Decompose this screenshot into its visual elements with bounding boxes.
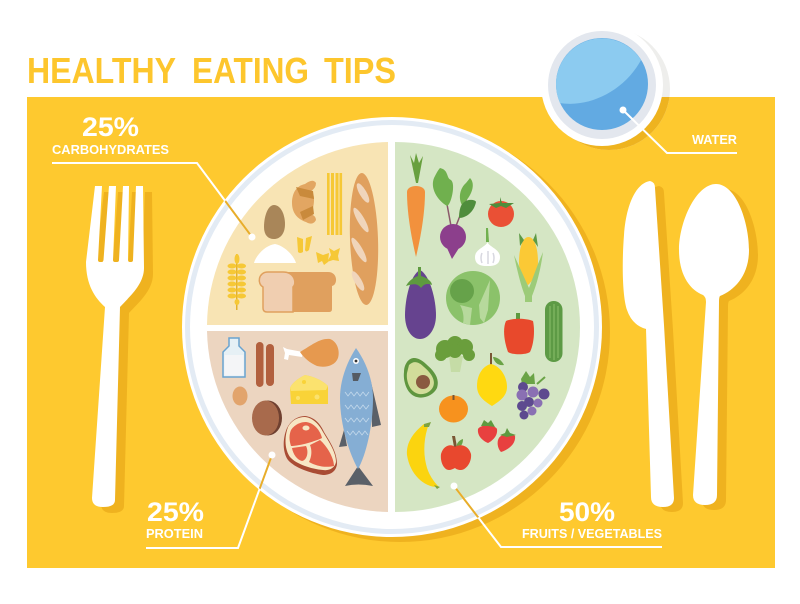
callout: carbohydrates xyxy=(52,112,256,240)
protein section xyxy=(207,331,388,512)
milk bottle xyxy=(223,338,245,377)
fish xyxy=(339,348,381,486)
fruits and vegetables section xyxy=(395,142,580,512)
broccoli xyxy=(435,336,475,372)
callout: water: WATER xyxy=(692,133,737,147)
icon: water glass xyxy=(541,24,670,150)
title xyxy=(27,50,396,91)
loaf of bread xyxy=(259,272,336,312)
sausages xyxy=(256,342,274,387)
burger patty xyxy=(252,400,282,436)
chicken leg xyxy=(283,339,339,367)
callout: protein xyxy=(146,452,276,548)
strawberries xyxy=(478,420,516,452)
croissant xyxy=(292,181,316,224)
egg xyxy=(232,386,248,406)
cheese xyxy=(290,375,328,404)
potato xyxy=(264,205,285,239)
callout: protein: PROTEIN xyxy=(146,526,203,541)
callout: carbohydrates: CARBOHYDRATES xyxy=(52,142,169,157)
title: TIPS xyxy=(324,50,396,91)
farfalle xyxy=(316,248,340,265)
icon: spoon xyxy=(679,184,758,510)
icon: knife xyxy=(623,181,683,512)
garlic xyxy=(475,228,500,266)
carrot xyxy=(407,153,425,257)
wheat xyxy=(228,254,246,310)
plate xyxy=(182,117,610,542)
icon: fork xyxy=(86,186,153,513)
red bell pepper xyxy=(504,313,534,354)
fruits and vegetables foods xyxy=(404,153,562,489)
lemon xyxy=(477,353,507,406)
cucumber xyxy=(545,301,562,362)
callout: fruits and vegetables xyxy=(450,482,662,547)
tomato xyxy=(488,197,514,227)
callout: fruits and vegetables: FRUITS / VEGETABLES xyxy=(522,526,662,541)
avocado xyxy=(404,358,438,398)
callout: water xyxy=(620,106,737,153)
yellow placemat panel xyxy=(27,97,775,568)
banana xyxy=(407,422,440,489)
callout: fruits and vegetables: 50% xyxy=(559,497,615,527)
protein foods xyxy=(223,338,381,486)
carbohydrates section xyxy=(207,142,388,325)
callout: carbohydrates: 25% xyxy=(82,112,139,142)
title: HEALTHY xyxy=(27,50,176,91)
beet xyxy=(433,168,476,259)
steak xyxy=(284,416,337,475)
orange xyxy=(439,395,468,422)
penne xyxy=(297,236,312,253)
baguette xyxy=(348,173,380,305)
callout: protein: 25% xyxy=(147,497,204,527)
cabbage xyxy=(446,271,500,325)
eggplant xyxy=(405,267,436,339)
flour pile xyxy=(254,244,296,263)
apple xyxy=(441,436,471,470)
corn xyxy=(514,233,543,302)
carbohydrate foods xyxy=(228,173,380,312)
spaghetti xyxy=(327,173,342,235)
title: EATING xyxy=(192,50,309,91)
grapes xyxy=(516,371,550,420)
